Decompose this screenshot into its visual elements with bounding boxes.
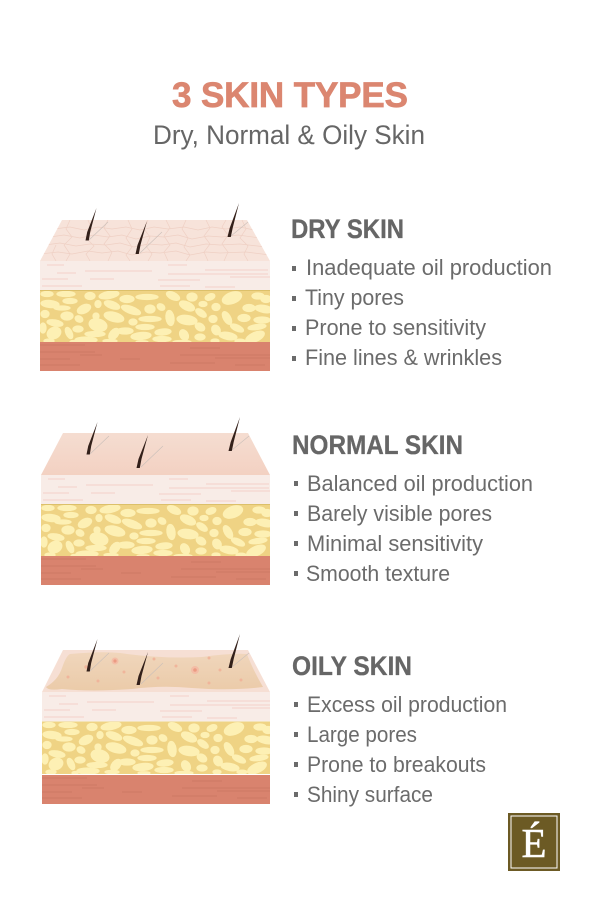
bullet list xyxy=(292,255,552,370)
heading: DRY SKIN xyxy=(291,214,404,244)
illustration: normal skin layers xyxy=(41,417,274,585)
bullet list: Large pores xyxy=(307,722,417,747)
title: 3 SKIN TYPES xyxy=(172,76,408,115)
bullet list: Barely visible pores xyxy=(307,501,492,526)
bullet list: Minimal sensitivity xyxy=(307,531,483,556)
illustration: oily skin layers xyxy=(42,634,275,807)
bullet list: Shiny surface xyxy=(307,782,433,807)
logo xyxy=(508,813,560,871)
hairs xyxy=(86,417,249,468)
illustration: dry skin layers xyxy=(40,203,273,371)
bullet list: Excess oil production xyxy=(307,692,507,717)
hairs xyxy=(86,634,249,685)
skin surface with cracks xyxy=(40,220,270,261)
heading: OILY SKIN xyxy=(292,651,412,681)
bullet list: Fine lines & wrinkles xyxy=(305,345,502,370)
bullet list: Smooth texture xyxy=(306,561,450,586)
skin surface with oil xyxy=(42,650,270,692)
text block: dry skin xyxy=(291,214,552,370)
bullet list: Tiny pores xyxy=(305,285,404,310)
bullet list xyxy=(294,692,507,807)
logo: É xyxy=(521,820,547,866)
hairs xyxy=(86,203,248,254)
bullet list: Inadequate oil production xyxy=(306,255,552,280)
text block: normal skin xyxy=(292,430,533,586)
bullet list: Balanced oil production xyxy=(307,471,533,496)
subtitle: Dry, Normal & Oily Skin xyxy=(153,120,425,150)
bullet list: Prone to breakouts xyxy=(307,752,486,777)
bullet list: Prone to sensitivity xyxy=(305,315,486,340)
text block: oily skin xyxy=(292,651,507,807)
heading: NORMAL SKIN xyxy=(292,430,463,460)
skin surface xyxy=(41,433,270,475)
bullet list xyxy=(294,471,533,586)
